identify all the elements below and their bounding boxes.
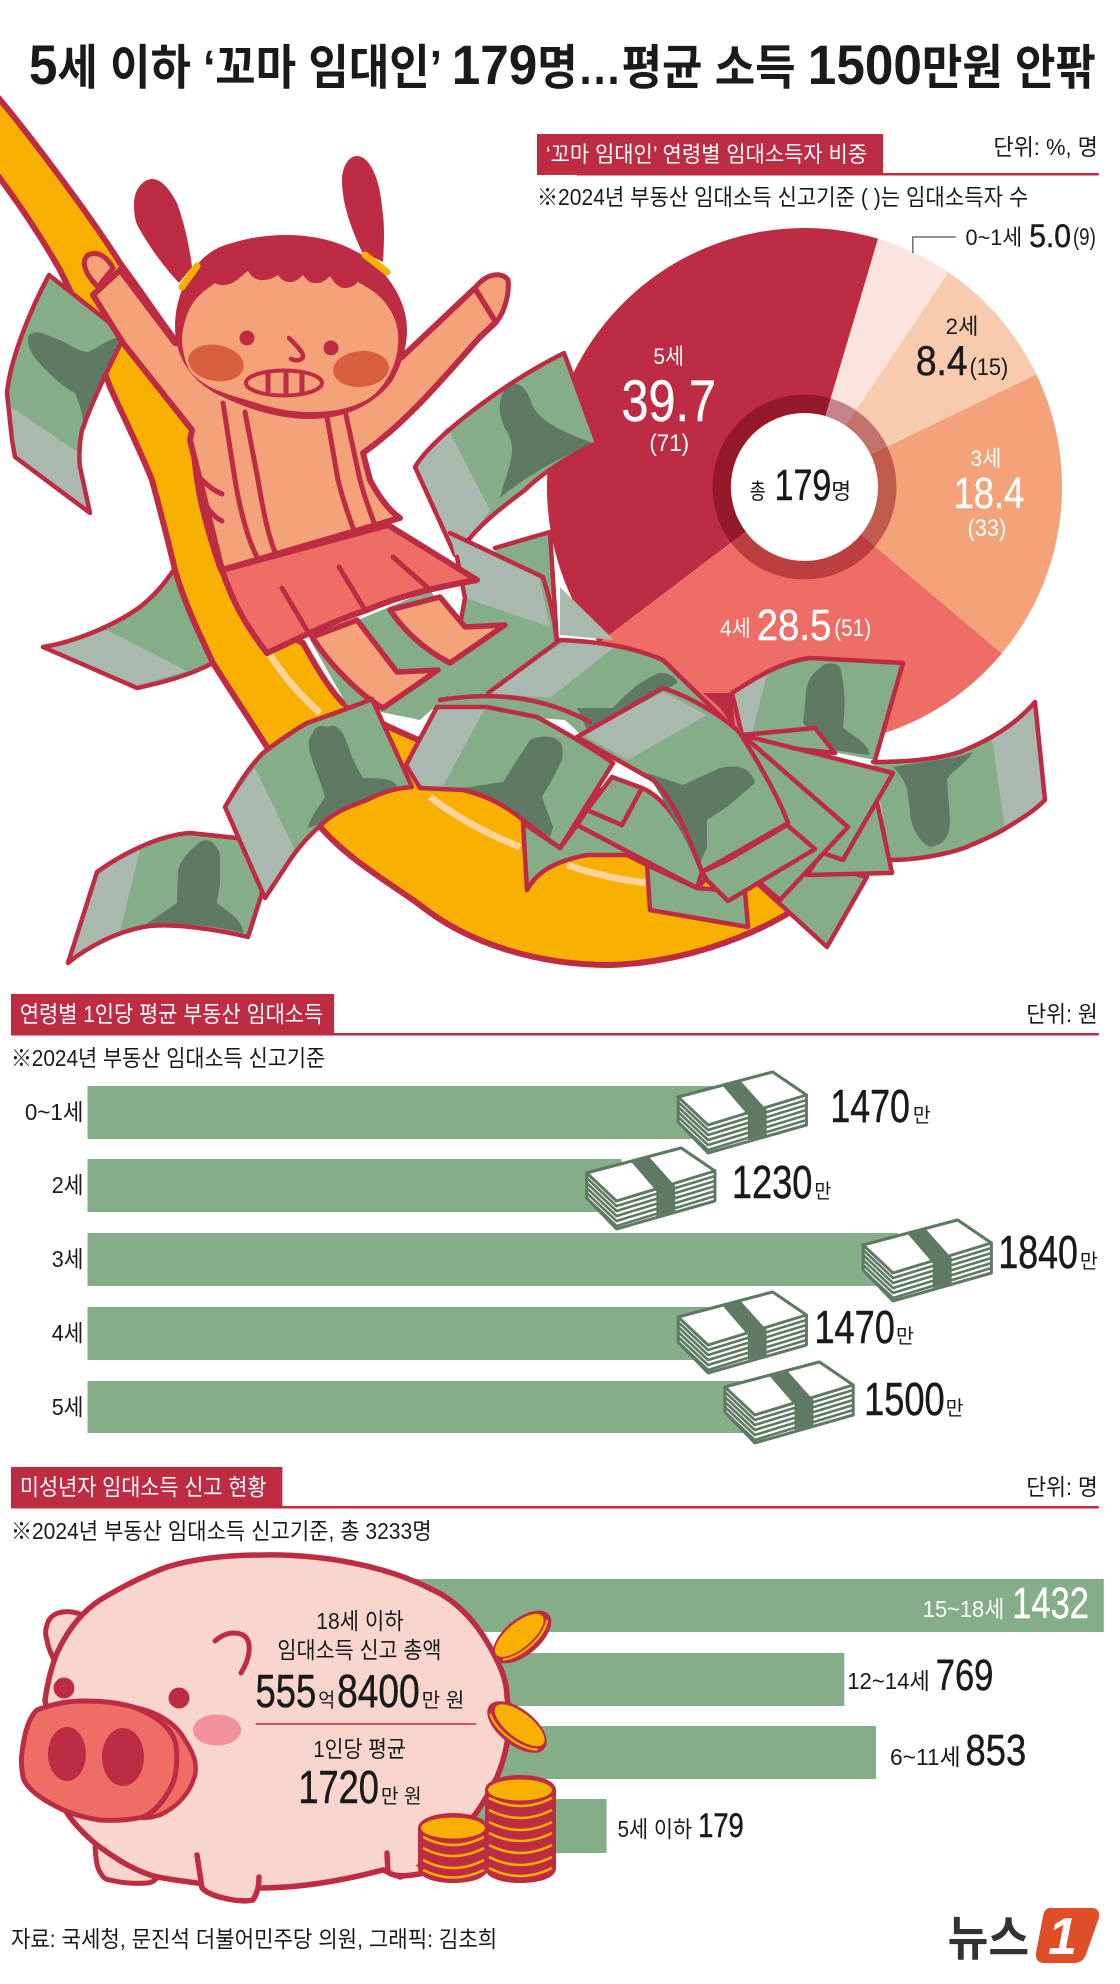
unit label 3: 단위: 명 [1026, 1474, 1098, 1500]
bill sheet [647, 865, 748, 927]
label: 3세: 18.4 [954, 469, 1024, 518]
bill: left curl, lowest [68, 833, 263, 963]
title: 5세 이하 ‘꼬마 임대인’ 179명…평균 소득 1500만원 안팎 [29, 33, 1096, 96]
slice: 5세 [547, 228, 878, 643]
bill: top of the pile [440, 640, 735, 780]
pig text: per person: 만 원 [381, 1785, 422, 1808]
section header 1 [537, 134, 1099, 176]
bill: large left of pile [225, 699, 412, 898]
section header 3 [11, 1467, 1099, 1508]
bill sheet [523, 790, 715, 890]
pig cheek [193, 1714, 241, 1746]
pig text: total: 임대소득 신고 총액 [277, 1637, 442, 1663]
bill sheet [807, 802, 892, 875]
bar: 15~18세: 1432 [1012, 1579, 1089, 1628]
bill: lower left, behind slide [43, 568, 213, 688]
donut hole [731, 413, 878, 561]
bar: 12~14세: 12~14세 [847, 1668, 930, 1694]
hair ties [182, 255, 387, 287]
slice: 4세 [599, 487, 1002, 746]
pig snout [21, 1701, 196, 1820]
News1 logo: 뉴스 [948, 1913, 1029, 1966]
bar: 5세 이하: 179 [698, 1807, 744, 1845]
pig eyes [53, 1678, 74, 1698]
row: 0~1세 [25, 1072, 931, 1153]
bar: 15~18세: 15~18세 [923, 1596, 1004, 1622]
bill sheet [587, 777, 642, 825]
bill sheet [720, 733, 848, 900]
label: 5세: 39.7 [622, 370, 716, 434]
row: 4세: 만 [896, 1325, 914, 1348]
label: 2세: (15) [970, 354, 1008, 381]
label: 2세 [916, 314, 1008, 384]
coin upper [484, 1601, 560, 1673]
pie chart: age share of landlords [547, 228, 1062, 746]
row: 0~1세: 만 [913, 1104, 931, 1127]
pig ear and back leg [46, 1612, 157, 1883]
bar: 12~14세: 769 [936, 1651, 993, 1700]
pig text: total: 만 원 [422, 1689, 464, 1712]
row: 3세 [52, 1220, 1098, 1301]
bill: behind the pile [310, 532, 614, 722]
row: 4세: 1470 [814, 1301, 895, 1353]
row: 5세: 5세 [52, 1394, 84, 1420]
pig text: per person [298, 1736, 422, 1813]
face [182, 271, 398, 412]
pig body [45, 1555, 509, 1888]
bar chart: minors reporting rental income [398, 1579, 1104, 1853]
center total: 179 [775, 461, 831, 510]
piggy bank [21, 1555, 560, 1901]
pig text: total: 18세 이하 [316, 1608, 404, 1634]
label: 3세: 3세 [971, 446, 1001, 471]
pig text: total: 8400 [337, 1665, 420, 1717]
center total: 명 [831, 479, 851, 504]
bill: large centre of pile [577, 688, 788, 872]
bill sheet [742, 728, 835, 753]
bill sheet [702, 825, 815, 901]
row: 2세: 1230 [732, 1156, 812, 1208]
source credit: 자료: 국세청, 문진석 더불어민주당 의원, 그래픽: 김초희 [11, 1926, 497, 1952]
label: 0~1세 [913, 218, 1096, 254]
row: 5세: 만 [946, 1397, 964, 1420]
label: 0~1세: 0~1세 [966, 225, 1022, 250]
row: 0~1세: 1470 [830, 1080, 910, 1132]
label: 2세: 8.4 [916, 337, 968, 384]
legs [312, 620, 438, 708]
thumbs [84, 253, 508, 322]
bill: right of the body [415, 353, 597, 555]
bill sheet [577, 788, 702, 888]
bill: upper left [7, 275, 125, 513]
row: 4세 [52, 1292, 914, 1373]
section header 2 [11, 994, 1099, 1036]
bill: right top [732, 658, 903, 760]
News1 logo [948, 1907, 1099, 1966]
label: 4세: 28.5 [757, 601, 831, 650]
label: 3세: (33) [968, 515, 1006, 542]
pig text: total [256, 1608, 464, 1717]
arms and torso [93, 270, 496, 570]
skirt pleats [282, 557, 427, 632]
pig text: per person: 1720 [298, 1761, 379, 1813]
label: 0~1세: (9) [1073, 224, 1096, 251]
row: 5세 [52, 1362, 964, 1443]
bill sheet [742, 735, 893, 860]
label: 5세 [622, 344, 716, 457]
hair tails [134, 156, 384, 283]
News1 logo: 1 [1048, 1907, 1077, 1965]
label: 3세 [954, 446, 1024, 542]
label: 5세: 5세 [653, 344, 684, 369]
row: 2세: 만 [814, 1180, 831, 1203]
label: 4세: 4세 [720, 616, 751, 641]
row: 3세: 1840 [998, 1226, 1078, 1278]
row: 2세 [52, 1148, 831, 1229]
bar: 15~18세 [398, 1579, 1104, 1632]
pig legs [197, 1853, 430, 1901]
coin stack left [418, 1813, 488, 1883]
unit label 1: 단위: %, 명 [993, 134, 1098, 160]
row: 2세: 2세 [52, 1172, 84, 1198]
bar: 12~14세 [447, 1651, 993, 1706]
bar: 6~11세 [447, 1726, 1026, 1779]
center total: 총 [750, 479, 766, 504]
note 2: ※2024년 부동산 임대소득 신고기준 [11, 1045, 325, 1071]
torso lines [197, 403, 375, 557]
pig text: total: 억 [318, 1689, 335, 1712]
eyes and nose [239, 330, 338, 360]
coin slot mark [215, 1633, 249, 1673]
slice: 0~1세 [804, 239, 948, 487]
bar: 5세 이하 [447, 1799, 744, 1853]
slide highlight [270, 655, 647, 883]
heading: ‘꼬마 임대인’ 연령별 임대소득자 비중 [546, 142, 867, 167]
heading: 연령별 1인당 평균 부동산 임대소득 [20, 1001, 323, 1027]
slice: 2세 [804, 272, 1036, 487]
head [175, 235, 407, 419]
unit label 2: 단위: 원 [1026, 1001, 1098, 1027]
label: 4세: (51) [834, 615, 871, 642]
slice: 3세 [804, 374, 1062, 654]
label: 0~1세: 5.0 [1029, 218, 1071, 254]
child character [84, 156, 508, 708]
pie labels [622, 218, 1096, 650]
row: 4세: 4세 [52, 1320, 84, 1346]
label: 5세: (71) [649, 430, 689, 457]
pile: lower bills [523, 728, 893, 947]
label: 2세: 2세 [946, 314, 978, 339]
pig text: total: 555 [256, 1665, 316, 1717]
heading: 미성년자 임대소득 신고 현황 [20, 1474, 266, 1500]
slide, child and money illustration [0, 88, 1045, 965]
bar: 6~11세: 853 [966, 1726, 1026, 1775]
bar: 6~11세: 6~11세 [890, 1744, 961, 1770]
label: 4세 [720, 601, 871, 650]
cheeks [185, 340, 247, 386]
donut ring [722, 404, 887, 570]
row: 0~1세: 0~1세 [25, 1099, 84, 1125]
coin lower [478, 1691, 556, 1763]
bar chart: average rental income by age [25, 1072, 1098, 1443]
note 3: ※2024년 부동산 임대소득 신고기준, 총 3233명 [11, 1518, 432, 1544]
bar: 5세 이하: 5세 이하 [618, 1816, 692, 1842]
coin stack right [485, 1775, 556, 1883]
mouth [246, 370, 322, 396]
note 1: ※2024년 부동산 임대소득 신고기준 ( )는 임대소득자 수 [537, 184, 1028, 210]
row: 3세: 3세 [52, 1246, 84, 1272]
yellow slide [0, 88, 797, 965]
bill: far right [873, 702, 1045, 860]
row: 3세: 만 [1080, 1250, 1098, 1273]
skirt [222, 525, 477, 653]
bill sheet [757, 860, 867, 947]
row: 5세: 1500 [864, 1373, 945, 1425]
bill: front of pile [406, 707, 613, 848]
pig text: per person: 1인당 평균 [313, 1736, 406, 1762]
